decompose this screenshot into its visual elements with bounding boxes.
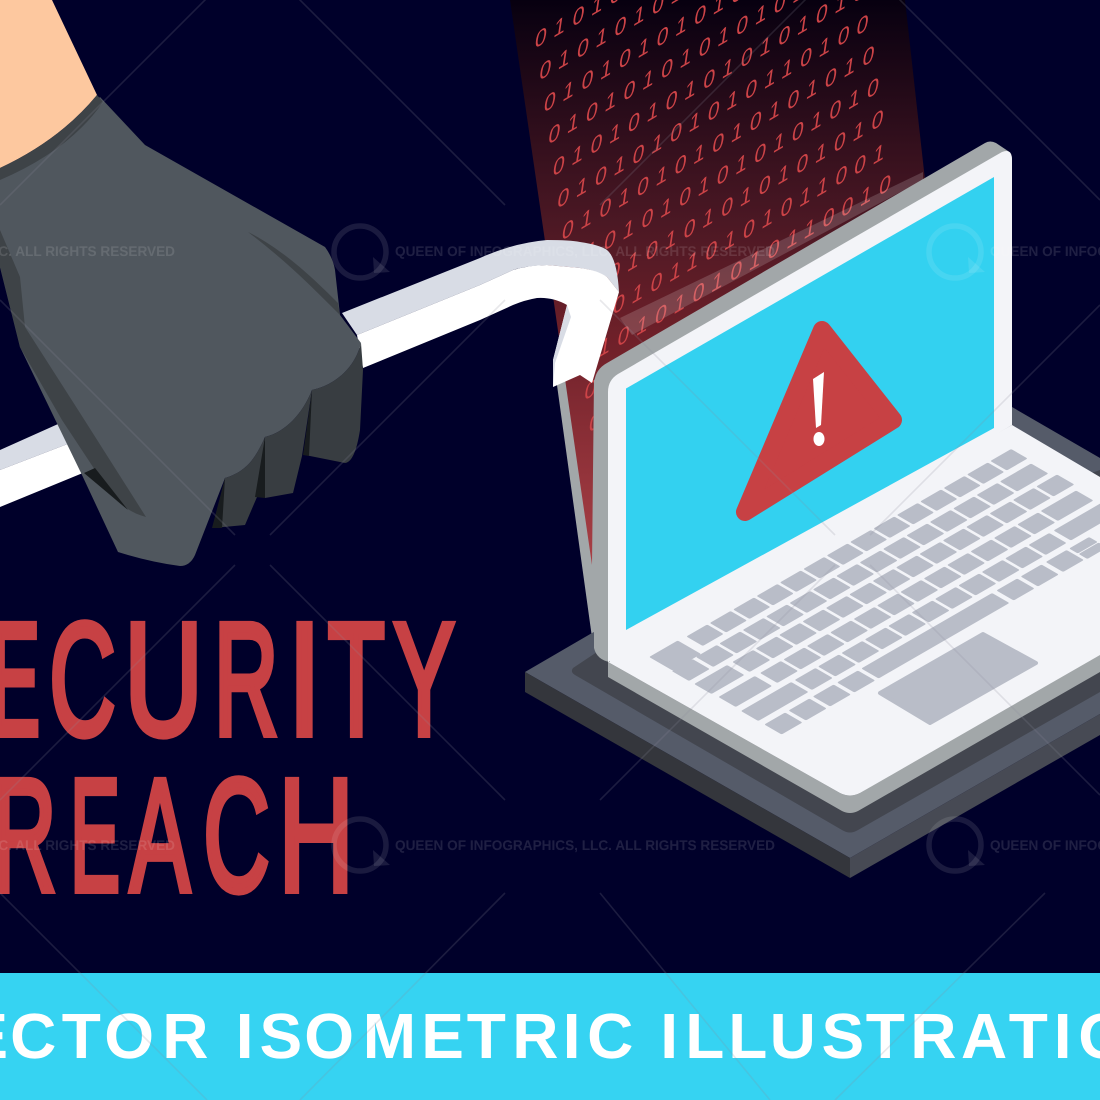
laptop base side xyxy=(608,650,1100,813)
crowbar xyxy=(0,240,619,507)
laptop xyxy=(594,142,1100,813)
banner text xyxy=(0,1000,1100,1072)
glove left shadow xyxy=(0,230,146,517)
title line 1: C xyxy=(49,590,116,768)
platform side right xyxy=(850,714,1100,878)
fingers shadow xyxy=(305,343,363,463)
skin xyxy=(0,0,97,168)
title line 1 xyxy=(0,590,455,768)
title line 1: T xyxy=(328,590,385,768)
title line 2: H xyxy=(279,746,354,924)
watermark text: QUEEN OF INFOGRAPHICS, LLC. ALL RIGHTS RESERVED xyxy=(395,837,775,853)
hand xyxy=(0,0,363,566)
binary digits: 01010110101011001 xyxy=(574,133,894,343)
watermark text xyxy=(0,243,1100,853)
binary digits: 01010101010101010 xyxy=(560,36,884,247)
bottom banner xyxy=(0,973,1100,1100)
finger slivers xyxy=(212,390,312,528)
exclamation mark xyxy=(813,372,824,446)
title line 2: A xyxy=(130,746,190,924)
title line 2: C xyxy=(203,746,270,924)
beam highlight band xyxy=(620,172,923,335)
binary digits xyxy=(533,0,911,439)
binary digits: 01010101010110100 xyxy=(556,4,878,215)
binary digits: 01010101010101010 xyxy=(583,196,906,407)
knuckle crease xyxy=(248,232,340,315)
title line 1: R xyxy=(214,590,278,768)
binary data beam xyxy=(510,0,925,565)
title xyxy=(0,590,455,924)
platform under laptop xyxy=(525,407,1100,878)
glove cuff xyxy=(0,95,103,180)
title line 2 xyxy=(0,746,354,924)
binary digits: 01010101010101010 xyxy=(587,228,911,439)
lid rim grey xyxy=(594,142,1012,662)
black wedge xyxy=(84,468,128,510)
platform recess shadow xyxy=(572,470,1100,832)
glove xyxy=(0,97,361,566)
banner text: ISOMETRIC xyxy=(236,1000,633,1072)
title line 1: I xyxy=(288,590,321,768)
crowbar front face xyxy=(357,265,619,387)
laptop lid back edge xyxy=(556,370,600,655)
crowbar left section xyxy=(0,420,78,470)
warning sign xyxy=(745,330,893,512)
binary digits: 01010101010101010 xyxy=(569,100,893,311)
trackpad xyxy=(880,634,1036,723)
lid bezel white xyxy=(608,151,1012,662)
title line 1: U xyxy=(124,590,203,768)
keyboard keys xyxy=(651,450,1100,734)
binary digits: 01010101010110010 xyxy=(578,164,900,375)
laptop base top xyxy=(608,425,1100,796)
warning triangle xyxy=(745,330,893,512)
crowbar hook inner side xyxy=(553,305,571,387)
crowbar upper face xyxy=(342,240,619,335)
platform side left xyxy=(525,672,850,878)
watermark text: QUEEN OF INFOGRAPHICS, LLC. ALL RIGHTS RESERVED xyxy=(395,243,775,259)
binary digits: 01010101010101010 xyxy=(565,68,888,279)
screen xyxy=(626,177,994,630)
title line 2: E xyxy=(70,746,120,924)
watermark Q icons xyxy=(334,226,985,871)
title line 1: Y xyxy=(394,590,455,768)
